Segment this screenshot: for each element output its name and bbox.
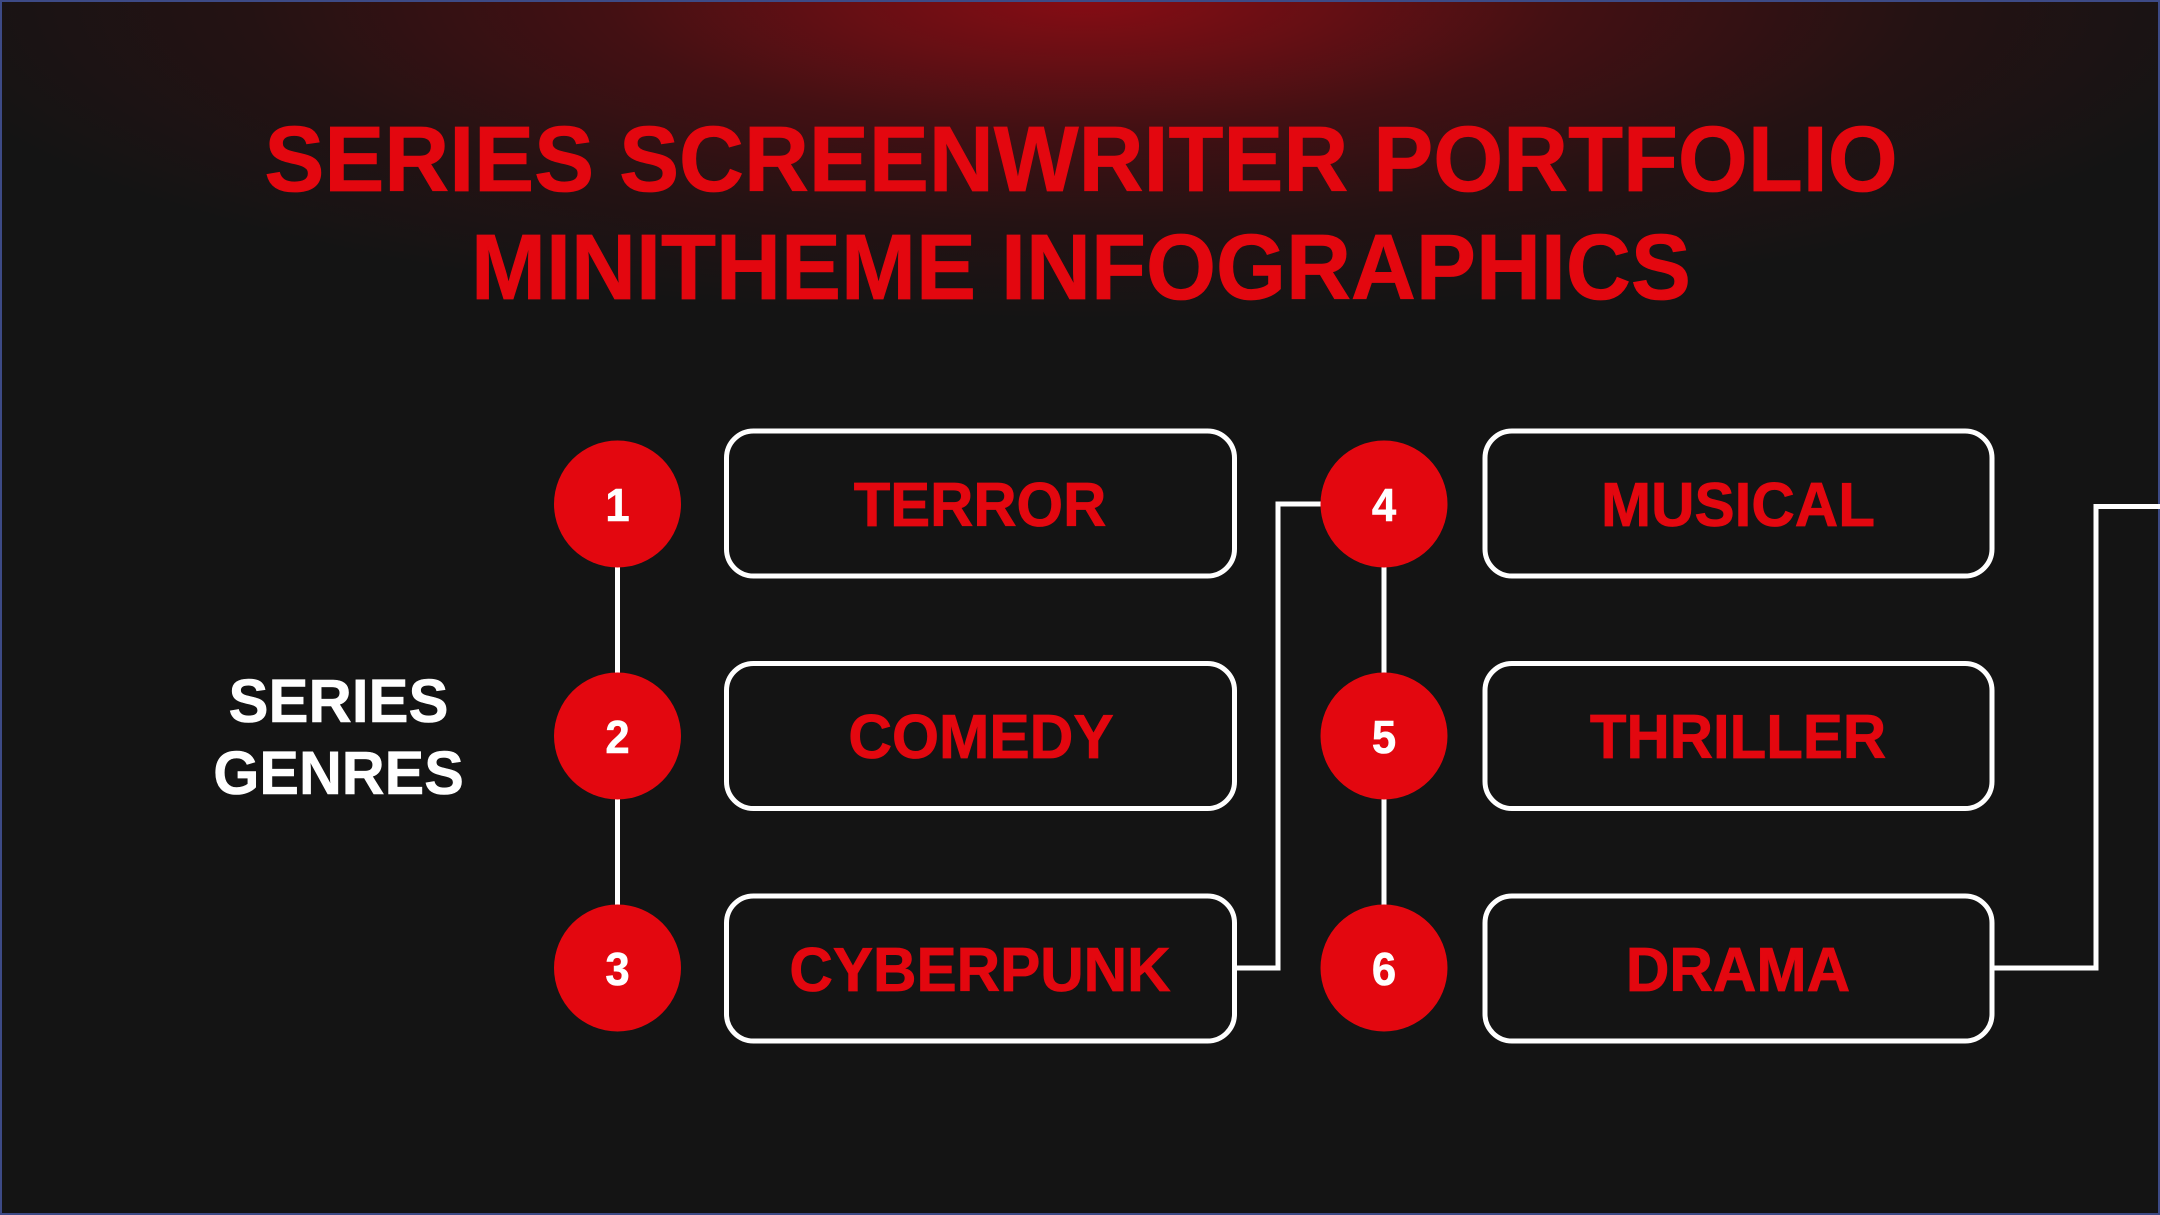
item 1: terror: 1 [605,479,630,531]
connector: cyberpunk to circle 4 [1236,504,1330,968]
item 5: thriller: THRILLER [1590,702,1886,771]
item 3: cyberpunk [554,896,1234,1041]
item 4: musical: 4 [1372,479,1396,531]
item 4: musical: MUSICAL [1601,470,1875,539]
item 6: drama: DRAMA [1626,935,1850,1004]
connector: drama to off-slide [1994,506,2160,968]
connector: circles 4 to 6 [1382,504,1386,968]
heading: series genres: GENRES [213,738,464,807]
heading: series genres: SERIES [229,666,448,735]
item 2: comedy [554,664,1234,808]
title [264,108,1898,319]
title: SERIES SCREENWRITER PORTFOLIO [264,108,1898,211]
item 6: drama [1320,896,1992,1041]
item 4: musical [1320,431,1992,576]
title: MINITHEME INFOGRAPHICS [471,216,1691,319]
item 5: thriller: 5 [1372,711,1396,763]
item 1: terror [554,431,1234,576]
item 6: drama: 6 [1372,943,1396,995]
item 1: terror: TERROR [854,470,1106,539]
heading: series genres [213,666,464,807]
item 2: comedy: 2 [605,711,630,763]
item 5: thriller [1320,664,1992,808]
item 3: cyberpunk: CYBERPUNK [789,935,1171,1004]
item 2: comedy: COMEDY [848,702,1114,771]
top red glow [0,0,2160,340]
connector: circles 1 to 3 [615,504,620,968]
item 3: cyberpunk: 3 [605,943,630,995]
